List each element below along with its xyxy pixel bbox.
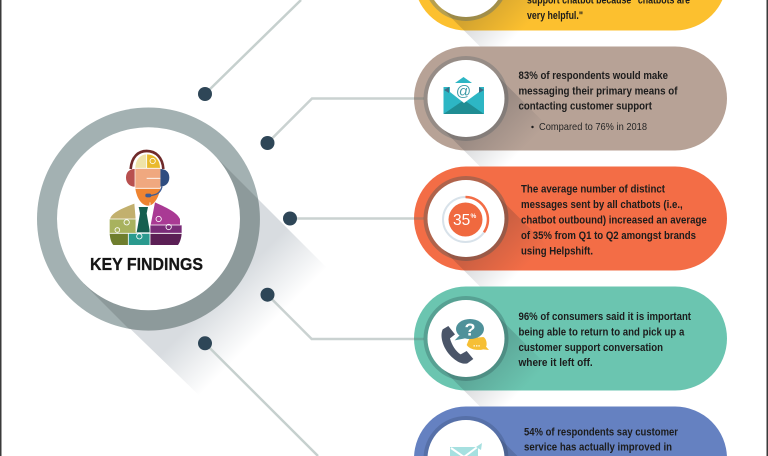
- finding text: Compared to 76% in 2018: [539, 121, 647, 133]
- finding text: 96% of consumers said it is important: [518, 311, 691, 323]
- icon: support agent made of puzzle pieces: [110, 151, 182, 245]
- finding text: [521, 184, 707, 258]
- key findings circle: [37, 108, 260, 331]
- connector: line to orange finding: [283, 212, 424, 226]
- panel: taupe finding: [414, 46, 727, 206]
- finding text: 83% of respondents would make: [518, 70, 668, 82]
- finding text: messaging their primary means of: [518, 85, 678, 97]
- icon: phone and speech bubbles: ?: [464, 319, 475, 339]
- icon: 35 percent gauge: %: [470, 213, 476, 220]
- shadow: key findings circle: [84, 154, 331, 404]
- panel: blue finding: [414, 406, 727, 456]
- connector: line to taupe finding: [260, 98, 424, 150]
- finding text: messages sent by all chatbots (i.e.,: [521, 199, 683, 211]
- finding text: [518, 311, 691, 369]
- finding text: chatbot outbound) increased an average: [521, 215, 707, 227]
- finding text: customer support conversation: [518, 342, 663, 354]
- icon: checked envelope: [450, 443, 482, 456]
- finding text: being able to return to and pick up a: [518, 326, 685, 338]
- icon: phone and speech bubbles: ...: [473, 339, 480, 349]
- heading: key findings: KEY FINDINGS: [90, 254, 203, 274]
- icon: 35 percent gauge: 35: [453, 212, 470, 229]
- finding text: The average number of distinct: [521, 184, 665, 196]
- finding text: [518, 70, 678, 133]
- finding text: of 35% from Q1 to Q2 amongst brands: [521, 230, 696, 242]
- finding text: using Helpshift.: [521, 246, 593, 258]
- icon: envelope: @: [456, 83, 471, 100]
- panel: yellow finding: [414, 0, 727, 86]
- icon: phone and speech bubbles: [442, 319, 489, 364]
- icon: envelope: [444, 77, 484, 114]
- finding text: 54% of respondents say customer: [524, 427, 679, 439]
- panel: orange finding: [414, 166, 727, 326]
- panel: yellow finding: very helpful.": [527, 10, 583, 22]
- finding text: where it left off.: [518, 357, 593, 369]
- finding text: contacting customer support: [518, 101, 652, 113]
- finding text: [524, 427, 679, 454]
- finding text: service has actually improved in: [524, 442, 672, 454]
- connector: line to blue finding: [198, 336, 318, 456]
- connector: line to yellow finding: [198, 0, 301, 101]
- connector: line to teal finding: [260, 288, 424, 339]
- icon: 35 percent gauge: [443, 197, 488, 242]
- panel: teal finding: [414, 286, 727, 446]
